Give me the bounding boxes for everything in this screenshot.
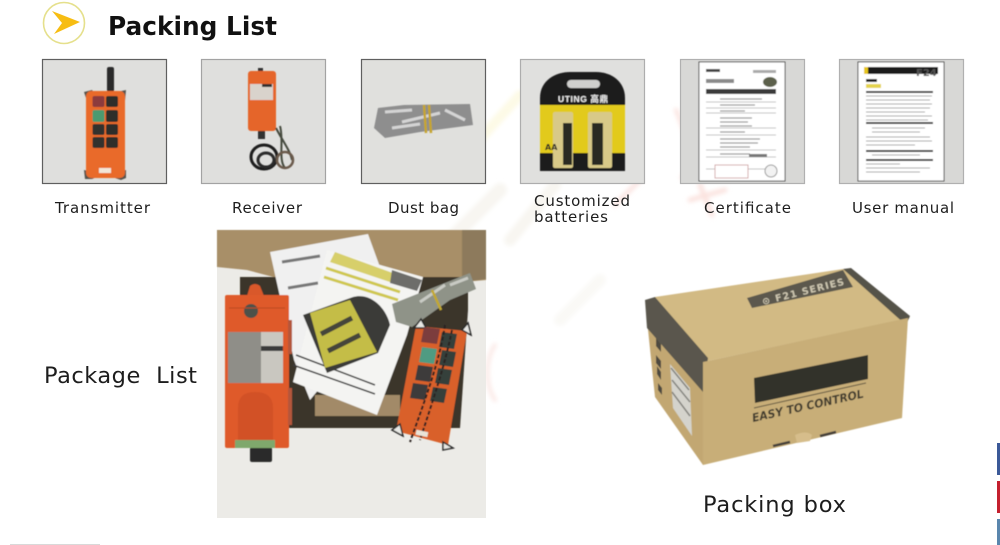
icon: receiver unit: [248, 68, 293, 169]
icon: battery card: [540, 72, 625, 171]
title: Packing List: [108, 12, 277, 42]
panel: receiver: [202, 60, 326, 184]
icon: user manual document: F24: [916, 68, 937, 79]
paper certificate: [270, 234, 392, 400]
icon: battery card: UTING 高鼎: [558, 94, 608, 104]
icon: certificate document: [699, 62, 785, 181]
receiver: [250, 447, 272, 462]
label: certificate: Certificate: [704, 199, 791, 217]
watermark: [440, 95, 725, 400]
icon: transmitter remote: [84, 67, 126, 180]
label: dust bag: Dust bag: [388, 199, 459, 217]
icon: battery card: AA: [545, 143, 558, 152]
label: packing box: Packing box: [703, 492, 846, 518]
photo: package contents: [217, 230, 486, 518]
transmitter: [396, 326, 467, 445]
icon: dust bag: [374, 104, 473, 138]
dust bag: [392, 273, 476, 327]
photo: packing box: ⊙ F21 SERIES: [761, 277, 845, 308]
panel: user manual: [840, 60, 964, 184]
label: user manual: User manual: [852, 199, 954, 217]
carton flaps: [217, 230, 486, 284]
label: receiver: Receiver: [232, 199, 303, 217]
photo: packing box: EASY TO CONTROL: [751, 387, 865, 425]
photo: packing box: [645, 268, 910, 465]
panel: transmitter: [42, 60, 166, 184]
label: customized batteries: batteries: [534, 208, 608, 226]
label: transmitter: Transmitter: [54, 199, 151, 217]
panel: batteries: [520, 60, 644, 184]
panel: certificate: [680, 60, 804, 184]
label: customized batteries: [534, 192, 630, 226]
paper manual: [293, 250, 423, 415]
label: customized batteries: Customized: [534, 192, 630, 210]
battery card: [303, 296, 390, 373]
label: package list: Package List: [44, 363, 197, 389]
side buttons: [997, 443, 1000, 545]
panel: dust bag: [362, 60, 486, 184]
title icon: yellow arrow in circle: [44, 2, 84, 44]
